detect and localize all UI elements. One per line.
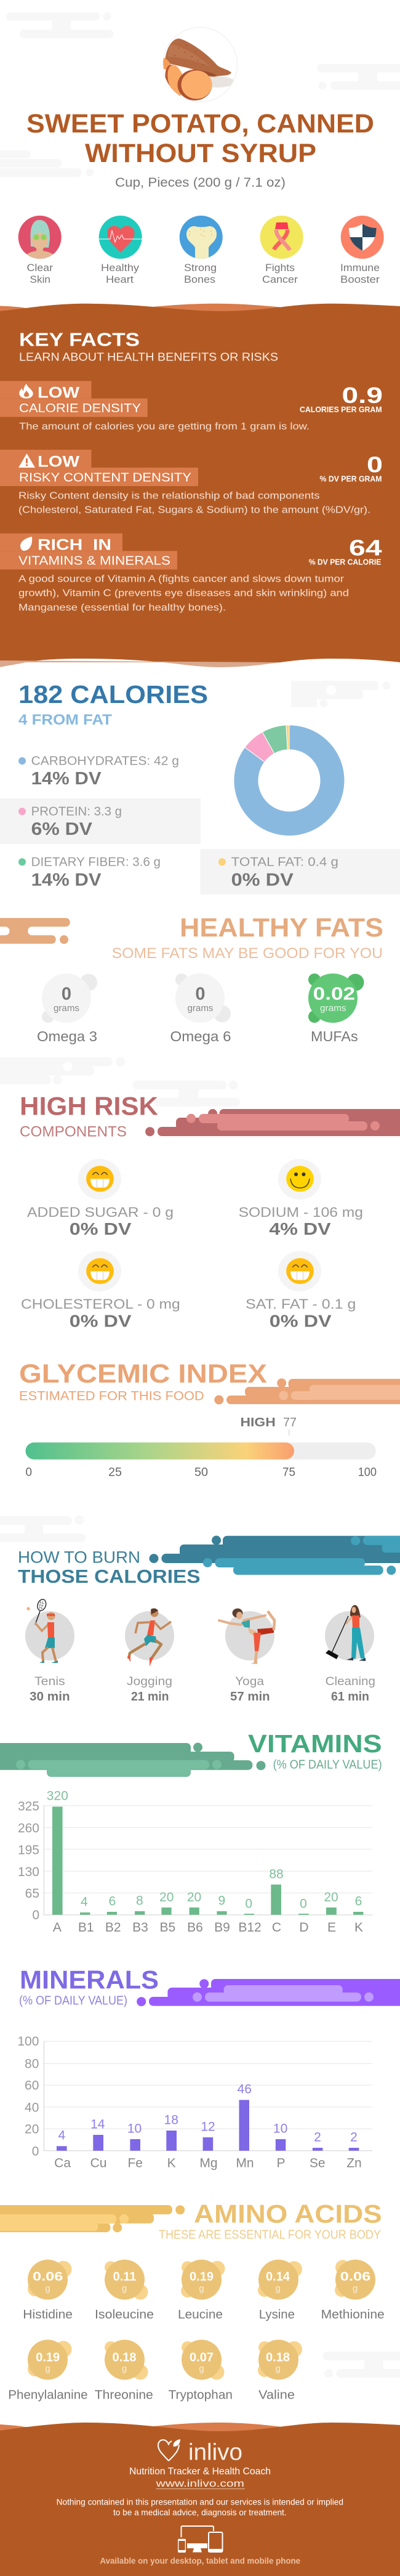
- benefit: strong bones: Strong: [184, 262, 217, 274]
- panel: calories heading: 4 FROM FAT: [18, 712, 112, 728]
- bar chart: minerals: 18: [164, 2113, 178, 2127]
- bar chart: vitamins: 325: [18, 1799, 39, 1813]
- benefit: fights cancer: Cancer: [262, 274, 298, 285]
- legend: total fat: TOTAL FAT: 0.4 g: [231, 856, 338, 869]
- wave: key facts bottom edge: [0, 660, 281, 667]
- bar chart: minerals: 46: [238, 2082, 252, 2096]
- benefit: fights cancer: [260, 216, 303, 285]
- bar chart: minerals: Fe: [127, 2156, 143, 2171]
- disclaimer: Nothing contained in this presentation and our services is intended or implied: [57, 2497, 343, 2506]
- fact: low risky content density: 0: [367, 452, 383, 477]
- section heading: [19, 329, 278, 364]
- bar chart: minerals: K: [167, 2156, 176, 2171]
- activity labels: [30, 1675, 375, 1704]
- risk: saturated fat: [246, 1251, 356, 1330]
- background cloud: amino acids: [322, 2352, 400, 2378]
- title: [26, 109, 374, 168]
- bar chart: vitamins: 8: [136, 1894, 143, 1908]
- background cloud: calories: [291, 681, 390, 707]
- heading: vitamins: VITAMINS: [248, 1729, 382, 1758]
- benefit: healthy heart: Healthy: [101, 262, 140, 274]
- amino: threonine: Threonine: [95, 2388, 153, 2402]
- bar chart: vitamins: B2: [105, 1920, 121, 1935]
- banner decoration: burn calories: [149, 1535, 400, 1575]
- donut chart: calorie sources: [234, 725, 345, 836]
- bar chart: vitamins: B5: [160, 1920, 175, 1935]
- fact: rich in vitamins and minerals: Manganese (essential for healthy bones).: [18, 603, 226, 613]
- amino: methionine: g: [353, 2283, 358, 2294]
- fact: rich in vitamins and minerals: VITAMINS & MINERALS: [18, 555, 170, 568]
- bar chart: minerals: 80: [25, 2057, 39, 2071]
- amino: lysine: [258, 2260, 302, 2322]
- bar chart: vitamins: A: [53, 1920, 62, 1935]
- benefit: strong bones: [180, 216, 223, 285]
- activity labels: 30 min: [30, 1690, 70, 1704]
- amino: phenylalanine: g: [45, 2363, 50, 2374]
- amino: valine: g: [275, 2363, 281, 2374]
- serving size: Cup, Pieces (200 g / 7.1 oz): [115, 176, 286, 190]
- risk: sodium: SODIUM - 106 mg: [239, 1205, 363, 1220]
- bar chart: minerals: 60: [25, 2079, 39, 2093]
- amino: methionine: Methionine: [321, 2308, 385, 2322]
- fact: low calorie density: 0.9: [342, 383, 383, 408]
- fact: low calorie density: The amount of calories you are getting from 1 gram is low.: [19, 421, 310, 432]
- bar chart: minerals: P: [276, 2156, 286, 2171]
- bar chart: vitamins: 20: [324, 1890, 338, 1904]
- fat: omega 3: [37, 973, 97, 1044]
- fat: omega 6: Omega 6: [170, 1028, 231, 1044]
- disclaimer: to be a medical advice, diagnosis or treatment.: [113, 2507, 287, 2517]
- icon: inlivo logo: [158, 2439, 242, 2466]
- bar chart: minerals: 20: [25, 2123, 39, 2137]
- background clouds: high risk: [0, 1057, 240, 1107]
- amino: leucine: Leucine: [178, 2308, 223, 2322]
- amino: methionine: [321, 2260, 385, 2322]
- availability note: Available on your desktop, tablet and mobile phone: [100, 2556, 300, 2566]
- amino: isoleucine: [95, 2260, 154, 2322]
- fat: omega 3: grams: [54, 1003, 79, 1014]
- bar chart: minerals: [17, 2034, 372, 2171]
- fact: low risky content density: (Cholesterol, Saturated Fat, Sugars & Sodium) to the amount (%DV/gr).: [18, 505, 370, 516]
- amino: threonine: [95, 2340, 153, 2402]
- banner decoration: glycemic index: [214, 1378, 400, 1405]
- gauge: glycemic index value: 0: [26, 1466, 32, 1479]
- legend: protein: [0, 798, 201, 844]
- fact: low risky content density: RISKY CONTENT DENSITY: [19, 471, 191, 485]
- fact: rich in vitamins and minerals: [0, 534, 382, 613]
- benefit: clear skin: Skin: [30, 274, 50, 285]
- amino: histidine: g: [45, 2283, 50, 2294]
- bar chart: minerals: 12: [201, 2119, 215, 2134]
- bar chart: vitamins: 6: [109, 1895, 116, 1909]
- panel: key facts: [0, 304, 400, 662]
- bar chart: vitamins: B12: [238, 1920, 262, 1935]
- bar chart: minerals: Ca: [54, 2156, 71, 2171]
- heading: minerals: [19, 1965, 159, 2007]
- bar chart: minerals: 100: [17, 2034, 39, 2049]
- bar chart: vitamins: 0: [32, 1908, 39, 1922]
- benefit: clear skin: [18, 216, 62, 285]
- risk: cholesterol: 0% DV: [70, 1311, 132, 1330]
- legend: total fat: [201, 849, 400, 895]
- gauge: glycemic index value: 77: [283, 1416, 297, 1429]
- heading: how to burn those calories: [18, 1548, 201, 1587]
- bar chart: vitamins: K: [354, 1920, 363, 1935]
- bar chart: minerals: Mn: [236, 2156, 254, 2171]
- legend: dietary fiber: DIETARY FIBER: 3.6 g: [31, 856, 161, 869]
- legend: protein: PROTEIN: 3.3 g: [31, 805, 122, 818]
- risk: sodium: [239, 1159, 363, 1238]
- amino: leucine: 0.19: [190, 2270, 214, 2284]
- amino: isoleucine: 0.11: [113, 2270, 136, 2284]
- fact: rich in vitamins and minerals: RICH IN: [38, 537, 111, 554]
- benefit: immune booster: [340, 216, 384, 285]
- fact: rich in vitamins and minerals: % DV PER CALORIE: [309, 558, 382, 567]
- activity: yoga: [219, 1608, 274, 1664]
- fact: rich in vitamins and minerals: growth), Vitamin C (prevents eye diseases and skin wrinkling) and: [18, 588, 349, 599]
- tagline and link: Nutrition Tracker & Health Coach: [129, 2466, 271, 2477]
- risk: added sugar: [27, 1159, 174, 1238]
- bar chart: vitamins: 320: [47, 1789, 68, 1803]
- benefit: strong bones: Bones: [184, 274, 215, 285]
- benefit: clear skin: Clear: [27, 262, 53, 274]
- amino: isoleucine: Isoleucine: [95, 2308, 154, 2322]
- banner decoration: healthy fats: [0, 918, 70, 944]
- banner decoration: high risk: [145, 1109, 400, 1136]
- heading: how to burn those calories: THOSE CALORIES: [18, 1566, 201, 1587]
- heading: healthy fats: HEALTHY FATS: [180, 913, 383, 943]
- background clouds: header: [0, 12, 400, 177]
- heading: vitamins: (% OF DAILY VALUE): [273, 1758, 382, 1772]
- bar chart: vitamins: 130: [18, 1865, 39, 1879]
- heading: minerals: MINERALS: [20, 1965, 159, 1994]
- heading: how to burn those calories: HOW TO BURN: [18, 1548, 140, 1567]
- heading: amino acids: THESE ARE ESSENTIAL FOR YOUR BODY: [159, 2228, 381, 2241]
- fat: omega 3: 0: [62, 984, 71, 1004]
- amino: methionine: 0.06: [340, 2270, 370, 2284]
- heading: vitamins: [248, 1729, 382, 1772]
- bar chart: minerals: Zn: [346, 2156, 362, 2171]
- bar chart: vitamins: B3: [132, 1920, 148, 1935]
- banner decoration: amino acids: [0, 2205, 185, 2232]
- heading: amino acids: [159, 2199, 382, 2241]
- activity labels: 21 min: [131, 1690, 169, 1704]
- amino: lysine: g: [275, 2283, 281, 2294]
- bar chart: vitamins: C: [272, 1920, 281, 1935]
- benefit: healthy heart: [99, 216, 142, 285]
- fact: low risky content density: LOW: [38, 453, 79, 470]
- bar chart: minerals: 0: [32, 2144, 39, 2158]
- legend: carbohydrates: CARBOHYDRATES: 42 g: [31, 755, 179, 768]
- activity labels: Tenis: [34, 1675, 65, 1688]
- fact: low risky content density: Risky Content density is the relationship of bad components: [18, 490, 320, 501]
- tagline and link: [129, 2466, 271, 2489]
- bar chart: vitamins: B9: [214, 1920, 230, 1935]
- activity: jogging: [125, 1608, 174, 1667]
- amino: tryptophan: 0.07: [190, 2350, 214, 2364]
- activity: cleaning: [325, 1605, 374, 1661]
- icon: inlivo logo: inlivo: [188, 2440, 242, 2466]
- heading: glycemic index: [19, 1359, 267, 1403]
- title: WITHOUT SYRUP: [85, 139, 316, 168]
- amino: lysine: Lysine: [259, 2308, 295, 2322]
- bar chart: vitamins: 65: [25, 1887, 39, 1901]
- banner decoration: vitamins: [0, 1742, 266, 1777]
- legend: dietary fiber: 14% DV: [31, 870, 102, 890]
- heading: high risk: COMPONENTS: [20, 1123, 127, 1140]
- tagline and link: www.inlivo.com: [155, 2479, 244, 2489]
- risk: cholesterol: CHOLESTEROL - 0 mg: [21, 1296, 180, 1312]
- bar chart: minerals: Se: [310, 2156, 326, 2171]
- fat: omega 6: grams: [187, 1003, 213, 1014]
- fat: MUFAs: [308, 973, 364, 1044]
- amino: valine: 0.18: [266, 2350, 290, 2364]
- legend: total fat: 0% DV: [231, 870, 294, 890]
- amino: histidine: 0.06: [33, 2270, 63, 2284]
- heading: glycemic index: ESTIMATED FOR THIS FOOD: [19, 1389, 204, 1403]
- fact: low calorie density: CALORIE DENSITY: [19, 402, 141, 415]
- activity labels: Cleaning: [326, 1675, 375, 1688]
- amino: phenylalanine: [8, 2340, 88, 2402]
- bar chart: vitamins: 9: [218, 1894, 225, 1908]
- activity labels: 61 min: [331, 1690, 369, 1704]
- amino: histidine: [23, 2260, 73, 2322]
- gauge: glycemic index value: 25: [108, 1466, 122, 1479]
- background cloud: burn calories: [0, 1516, 86, 1542]
- risk: sodium: 4% DV: [269, 1219, 331, 1238]
- risk: cholesterol: [21, 1251, 180, 1330]
- risk: saturated fat: SAT. FAT - 0.1 g: [246, 1296, 356, 1312]
- activity labels: Jogging: [127, 1675, 172, 1688]
- bar chart: vitamins: 6: [355, 1895, 362, 1909]
- fact: rich in vitamins and minerals: A good source of Vitamin A (fights cancer and slows down tumor: [18, 574, 345, 584]
- bar chart: minerals: 14: [90, 2117, 105, 2131]
- legend: protein: 6% DV: [31, 819, 93, 839]
- bar chart: vitamins: 195: [18, 1843, 39, 1857]
- bar chart: minerals: Cu: [90, 2156, 106, 2171]
- benefit: immune booster: Immune: [340, 262, 380, 274]
- fact: low risky content density: [0, 450, 383, 516]
- bar chart: minerals: 40: [25, 2100, 39, 2115]
- heading: amino acids: AMINO ACIDS: [194, 2199, 382, 2228]
- panel: calories heading: 182 CALORIES: [18, 680, 208, 709]
- benefit: fights cancer: Fights: [265, 262, 295, 274]
- activity: tennis: [25, 1598, 74, 1663]
- gauge: glycemic index value: 50: [194, 1466, 208, 1479]
- bar chart: vitamins: 20: [159, 1890, 174, 1904]
- activity labels: Yoga: [235, 1675, 264, 1688]
- heading: healthy fats: SOME FATS MAY BE GOOD FOR YOU: [112, 945, 383, 962]
- panel: calories heading: [18, 680, 208, 728]
- fat: omega 3: Omega 3: [37, 1028, 97, 1044]
- benefit: immune booster: Booster: [340, 274, 380, 285]
- fat: omega 6: [170, 973, 231, 1044]
- bar chart: minerals: 2: [314, 2131, 321, 2145]
- bar chart: vitamins: B6: [187, 1920, 203, 1935]
- benefit: healthy heart: Heart: [106, 274, 134, 285]
- heading: high risk: [20, 1091, 158, 1140]
- amino: lysine: 0.14: [266, 2270, 290, 2284]
- heading: healthy fats: [112, 913, 383, 962]
- bar chart: vitamins: 260: [18, 1821, 39, 1835]
- icon: devices: [178, 2526, 223, 2553]
- bar chart: vitamins: [18, 1789, 372, 1935]
- bar chart: vitamins: 88: [269, 1867, 284, 1881]
- amino: phenylalanine: 0.19: [36, 2350, 60, 2364]
- panel: footer: [0, 2423, 400, 2576]
- bar chart: vitamins: 0: [245, 1897, 252, 1911]
- bar chart: minerals: 2: [350, 2131, 358, 2145]
- amino: tryptophan: g: [199, 2363, 204, 2374]
- fact: low calorie density: [0, 381, 383, 432]
- amino: isoleucine: g: [122, 2283, 127, 2294]
- amino: valine: Valine: [258, 2388, 295, 2402]
- bar chart: minerals: Mg: [199, 2156, 218, 2171]
- amino: leucine: g: [199, 2283, 204, 2294]
- amino: threonine: 0.18: [113, 2350, 136, 2364]
- bar chart: vitamins: 4: [81, 1895, 88, 1909]
- fat: omega 6: 0: [195, 984, 206, 1004]
- risk: added sugar: ADDED SUGAR - 0 g: [27, 1205, 174, 1220]
- section heading: LEARN ABOUT HEALTH BENEFITS OR RISKS: [19, 351, 278, 364]
- fat: MUFAs: grams: [320, 1003, 346, 1014]
- fact: low calorie density: CALORIES PER GRAM: [300, 405, 382, 414]
- fat: MUFAs: 0.02: [313, 984, 355, 1004]
- legend: carbohydrates: [18, 755, 179, 789]
- bar chart: vitamins: 0: [300, 1897, 307, 1911]
- title: SWEET POTATO, CANNED: [26, 109, 374, 139]
- bar chart: minerals: 10: [127, 2121, 142, 2135]
- bar chart: vitamins: E: [327, 1920, 336, 1935]
- gauge: glycemic index value: 75: [282, 1466, 295, 1479]
- fact: rich in vitamins and minerals: 64: [349, 535, 382, 561]
- bar chart: minerals: 10: [273, 2121, 287, 2135]
- amino: tryptophan: [169, 2340, 233, 2402]
- risk: added sugar: 0% DV: [70, 1219, 132, 1238]
- fact: low calorie density: LOW: [38, 384, 79, 402]
- risk: saturated fat: 0% DV: [270, 1311, 332, 1330]
- fat: MUFAs: MUFAs: [311, 1028, 358, 1044]
- fact: low risky content density: % DV PER GRAM: [320, 474, 382, 484]
- bar chart: minerals: 4: [58, 2128, 65, 2142]
- amino: tryptophan: Tryptophan: [169, 2388, 233, 2402]
- disclaimer: [57, 2497, 343, 2517]
- heading: minerals: (% OF DAILY VALUE): [19, 1994, 127, 2007]
- banner decoration: minerals: [137, 1979, 400, 2006]
- amino: threonine: g: [122, 2363, 127, 2374]
- bar chart: vitamins: 20: [187, 1890, 201, 1904]
- bar chart: vitamins: B1: [78, 1920, 94, 1935]
- gauge: glycemic index value: 100: [358, 1466, 377, 1479]
- section heading: KEY FACTS: [19, 329, 140, 351]
- bar chart: vitamins: D: [299, 1920, 309, 1935]
- icon: sweet potato photo: [162, 27, 238, 102]
- legend: dietary fiber: [18, 856, 161, 890]
- gauge: glycemic index value: [26, 1416, 377, 1479]
- gauge: glycemic index value: HIGH: [240, 1416, 276, 1429]
- heading: high risk: HIGH RISK: [20, 1091, 158, 1120]
- amino: valine: [258, 2340, 302, 2402]
- activity labels: 57 min: [230, 1690, 270, 1704]
- legend: carbohydrates: 14% DV: [31, 769, 102, 789]
- amino: phenylalanine: Phenylalanine: [8, 2388, 88, 2402]
- amino: leucine: [178, 2260, 225, 2322]
- amino: histidine: Histidine: [23, 2308, 73, 2322]
- heading: glycemic index: GLYCEMIC INDEX: [19, 1359, 267, 1389]
